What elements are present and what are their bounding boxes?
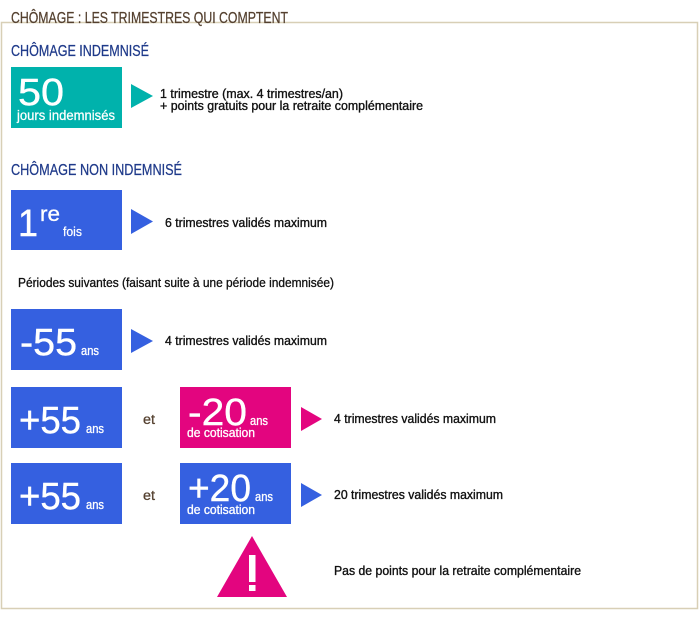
text: 20 trimestres: 20 trimestres validés maximum: [334, 488, 503, 502]
box: +55 ans: +55: [19, 400, 81, 442]
text: 1 trimestre: 1 trimestre (max. 4 trimestres/an): [160, 87, 343, 101]
box: 50 jours indemnisés: [11, 67, 122, 128]
icon: warning triangle: [217, 536, 287, 597]
box: -55 ans: [11, 309, 122, 370]
text: 1 trimestre: [160, 87, 423, 113]
box: +55 ans: ans: [86, 498, 104, 512]
box: +20 ans de cotisation: de cotisation: [187, 503, 255, 517]
box: 1re fois: 1: [18, 203, 38, 245]
box: 1re fois: fois: [63, 225, 82, 239]
box: -55 ans: -55: [20, 322, 77, 364]
box: 50 jours indemnisés: jours indemnisés: [16, 107, 115, 123]
text: et: et: [143, 412, 155, 427]
box: +55 ans: [11, 387, 122, 448]
box: -20 ans de cotisation: de cotisation: [187, 426, 255, 440]
heading: chômage indemnisé: CHÔMAGE INDEMNISÉ: [11, 43, 149, 60]
box: +55 ans: [11, 463, 122, 524]
box: 1re fois: re: [40, 203, 60, 226]
text: 4 trimestres: 4 trimestres validés maximum: [334, 412, 496, 426]
arrow: teal: [131, 84, 153, 108]
box: -55 ans: ans: [81, 344, 99, 358]
box: 1re fois: [11, 190, 122, 250]
arrow: blue: [131, 329, 153, 353]
box: -20 ans de cotisation: ans: [250, 414, 268, 428]
arrow: magenta: [301, 407, 322, 431]
arrow: blue: [131, 209, 153, 234]
box: +55 ans: ans: [86, 422, 104, 436]
box: +20 ans de cotisation: +20: [188, 468, 251, 510]
box: +55 ans: +55: [19, 476, 81, 518]
box: +20 ans de cotisation: ans: [255, 490, 273, 504]
text: 4 trimestres: 4 trimestres validés maximum: [165, 334, 327, 348]
title: CHÔMAGE : LES TRIMESTRES QUI COMPTENT: [11, 10, 288, 27]
box: +20 ans de cotisation: [180, 463, 291, 524]
box: -20 ans de cotisation: [180, 387, 291, 448]
text: périodes suivantes: Périodes suivantes (faisant suite à une période indemnisée): [18, 276, 334, 290]
box: 50 jours indemnisés: 50: [18, 72, 64, 114]
text: et: et: [143, 488, 155, 503]
text: 6 trimestres: 6 trimestres validés maximum: [165, 216, 327, 230]
heading: chômage non indemnisé: CHÔMAGE NON INDEMNISÉ: [11, 162, 182, 179]
box: -20 ans de cotisation: -20: [188, 392, 247, 434]
text: 1 trimestre: + points gratuits pour la retraite complémentaire: [160, 99, 423, 113]
text: pas de points: Pas de points pour la retraite complémentaire: [334, 564, 581, 578]
arrow: blue: [301, 483, 322, 507]
